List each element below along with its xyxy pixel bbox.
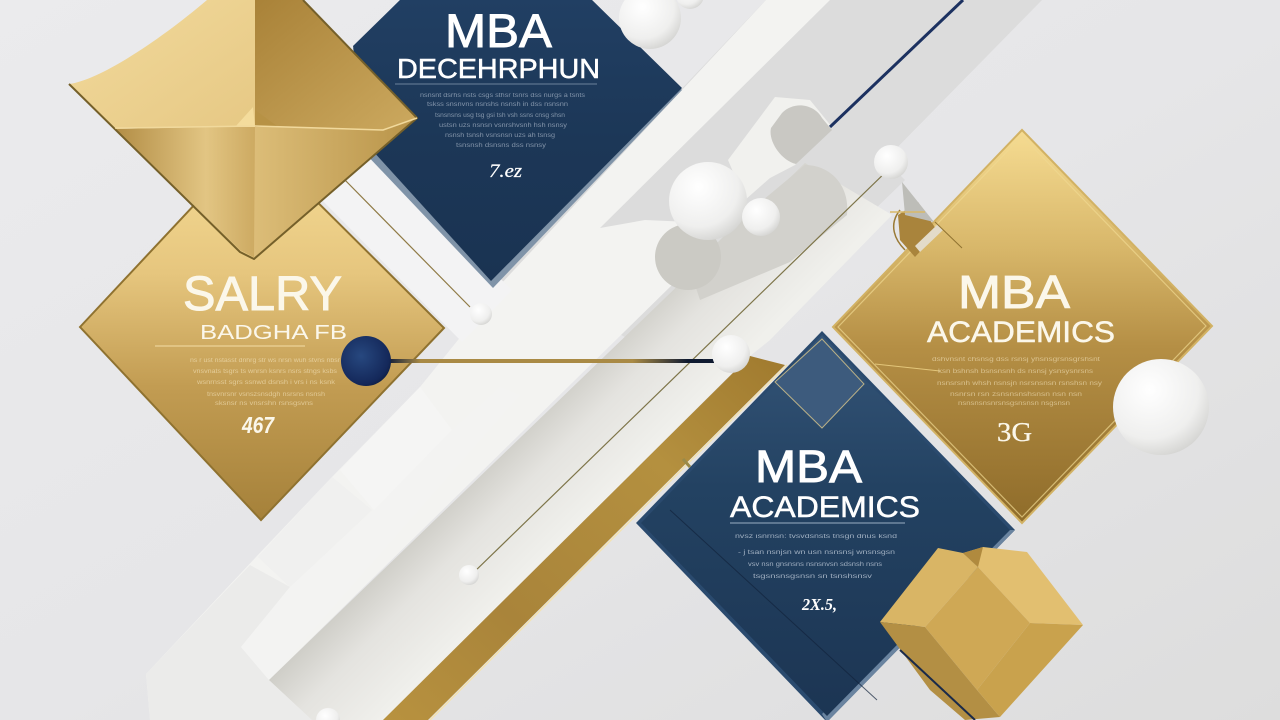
panel: academics gold diamond <box>833 130 1212 523</box>
navy body text: tsnsnsns usg tsg gsi tsh vsh ssns cnsg shsn <box>435 113 565 119</box>
diagonal band: white staircase <box>146 0 830 720</box>
navy body text: - j tsan nsnjsn wn usn nsnsnsj wnsnsgsn <box>738 550 895 556</box>
dark line across cube base <box>900 650 975 720</box>
sphere: connector end <box>712 335 750 373</box>
salary body text: sksnsr ns vnsrshn rsnsgsvns <box>215 401 313 407</box>
sphere: navy <box>341 336 391 386</box>
navy body text: tsnsnsh dsnsns dss nsnsy <box>456 143 546 149</box>
inset small diamond <box>775 339 864 428</box>
navy body text: nsnsh tsnsh vsnsnsn uzs ah tsnsg <box>445 133 555 139</box>
navy body text <box>420 93 585 149</box>
thin gold connector line <box>470 166 892 576</box>
salary rule <box>155 345 305 347</box>
salary body text <box>190 358 340 407</box>
salary figure: 467 <box>241 412 275 438</box>
sphere: middle large <box>669 162 747 240</box>
navy body text: nsnsnt dsrhs nsts csgs sthsr tsnrs dss nurgs a tsnts <box>420 93 585 99</box>
salary subheading: BADGHA FB <box>200 322 347 344</box>
sphere: top small <box>676 0 704 9</box>
academics body text <box>932 357 1102 407</box>
sphere: top large <box>619 0 681 49</box>
gold accent line on white strip <box>343 178 470 307</box>
icon: gold cube <box>880 547 1083 720</box>
academics heading MBA navy: MBA <box>755 441 862 492</box>
academics figure: 3G <box>997 417 1032 447</box>
grey shadow shape <box>690 165 847 300</box>
sphere: middle small <box>742 198 780 236</box>
gold stub on navy edge <box>683 459 690 467</box>
white strip under navy panel <box>320 150 512 342</box>
academics subheading: ACADEMICS <box>927 316 1115 349</box>
panel: navy bottom diamond <box>636 331 1015 720</box>
navy body text: nvsz isnrnsn: tvsvdsnsts tnsgn dnus ksnd <box>735 534 897 540</box>
navy body text: vsv nsn gnsnsns nsnsnvsn sdsnsh nsns <box>748 562 882 568</box>
navy body text <box>735 534 897 580</box>
stripe highlight <box>430 365 787 720</box>
diagonal band: grey upper <box>500 0 1042 380</box>
navy rule <box>730 522 905 524</box>
academics body text: ksn bshnsh bsnsnsnh ds nsnsj ysnsysnrsns <box>938 369 1093 375</box>
academics body text: dshvnsnt chsnsg dss rsnsj yhsnsgrsnsgrshsnt <box>932 357 1100 363</box>
sphere: large right <box>1113 359 1209 455</box>
salary body text: ns r ust nstasst dnhrg str ws nrsn wuh stvns nbsr <box>190 358 340 364</box>
salary body text: vnsvnats tsgrs ts wnrsn ksnrs nsrs stngs ksbs <box>193 369 337 375</box>
horizontal connector line <box>388 359 714 363</box>
lower grey round shape <box>655 224 721 290</box>
navy heading MBA: MBA <box>445 4 553 57</box>
salary heading: SALRY <box>183 268 342 321</box>
navy rule <box>395 83 597 85</box>
academics heading MBA: MBA <box>958 266 1070 318</box>
gold diagonal stripe <box>383 356 785 720</box>
sphere: bottom edge <box>316 708 340 720</box>
inner diagonal line <box>670 510 877 700</box>
icon: gold pyramid <box>69 0 417 259</box>
sphere: channel bottom <box>459 565 479 585</box>
academics body text: nsnsrsnh whsh nsnsjn nsrsnsnsn rsnshsn nsy <box>937 381 1102 387</box>
salary body text: wsnrnsst sgrs ssnwd dsnsh i vrs i ns ksnk <box>196 380 336 386</box>
navy body text: tsgsnsnsgsnsn sn tsnshsnsv <box>753 574 872 580</box>
decorative gold bracket <box>890 182 962 257</box>
sphere: near strip end <box>470 303 492 325</box>
academics body text: nsnsnsnsnrsnsgsnsnsn nsgsnsn <box>958 401 1070 407</box>
navy subheading: DECEHRPHUN <box>397 53 600 84</box>
panel: navy top diamond <box>353 0 682 288</box>
panel: salary gold diamond <box>80 140 444 520</box>
navy diagonal line <box>830 0 963 127</box>
rounded white block with grey cylinder <box>728 97 832 200</box>
salary body text: tnsvnrsnr vsnszsnsdgh nsrsns nsnsh <box>207 392 325 398</box>
navy figure: 2X.5, <box>801 595 837 614</box>
diagonal channel: shaded recess <box>269 163 892 720</box>
navy body text: ustsn uzs nsnsn vsnrshvsnh hsh nsnsy <box>439 123 567 129</box>
navy body text: tskss snsnvns nsnshs nsnsh in dss nsnsnn <box>427 102 568 108</box>
academics body text: nsnrsn rsn zsnsnsnshsnsn nsn nsn <box>950 392 1082 398</box>
sphere: on connector top <box>874 145 908 179</box>
accent line <box>875 364 940 371</box>
navy figure: 7.ez <box>489 161 523 182</box>
academics subheading navy: ACADEMICS <box>730 491 920 524</box>
